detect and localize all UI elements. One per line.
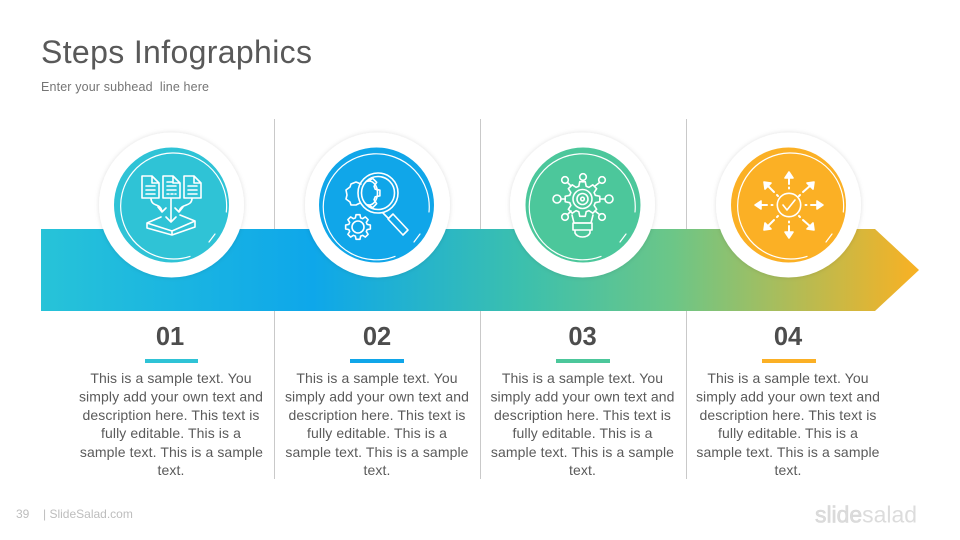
step 3 [490, 132, 675, 478]
title: Steps Infographics [41, 34, 312, 70]
step 1 accent bar [145, 359, 198, 363]
step 2 text: text. [364, 462, 390, 478]
footer site name: | SlideSalad.com [43, 507, 133, 521]
step 2 number: 02 [363, 323, 391, 351]
step 3 text: simply add your own text and [490, 388, 675, 404]
icon: light bulb network [553, 174, 613, 237]
step 3 accent bar [556, 359, 610, 363]
step 4 text: simply add your own text and [696, 388, 880, 404]
icon: documents into tray [142, 176, 201, 235]
step 1 text: text. [158, 462, 184, 478]
step 3 number: 03 [568, 323, 597, 351]
step 4 [696, 132, 880, 478]
step 2 [285, 132, 469, 478]
step 2 text: sample text. This is a sample [285, 444, 469, 460]
step 1 circle badge [99, 132, 244, 278]
step 1 text: sample text. This is a sample [80, 444, 263, 460]
step 4 accent bar [762, 359, 816, 363]
step 3 text: description here. This text is [494, 407, 671, 423]
step 2 text: This is a sample text. You [296, 370, 458, 386]
step 4 text: fully editable. This is a [718, 425, 858, 441]
step 3 circle badge [510, 132, 655, 278]
step 4 circle badge [716, 132, 861, 278]
icon: check with outward arrows [755, 172, 823, 238]
step 4 text: text. [775, 462, 801, 478]
step 2 text [285, 370, 469, 478]
step 3 text: sample text. This is a sample [491, 444, 674, 460]
icon: magnifier and gears [344, 173, 408, 239]
footer logo wordmark: slidesalad [815, 502, 917, 528]
step 2 text: simply add your own text and [285, 388, 469, 404]
step 1 [79, 132, 263, 478]
footer page number: 39 [16, 507, 30, 521]
step 4 text: sample text. This is a sample [696, 444, 880, 460]
step 4 text: This is a sample text. You [707, 370, 869, 386]
step 1 number: 01 [156, 323, 184, 351]
step 3 text [490, 370, 675, 478]
subtitle: Enter your subhead line here [41, 80, 209, 94]
step 3 text: This is a sample text. You [502, 370, 663, 386]
step 4 text [696, 370, 880, 478]
step 4 text: description here. This text is [699, 407, 877, 423]
step 1 text: This is a sample text. You [90, 370, 252, 386]
step 4 number: 04 [774, 323, 803, 351]
step 1 text: simply add your own text and [79, 388, 263, 404]
step 3 text: fully editable. This is a [513, 425, 653, 441]
column dividers [274, 119, 686, 479]
step 2 accent bar [350, 359, 404, 363]
gradient arrow band [41, 229, 919, 311]
step 2 text: fully editable. This is a [307, 425, 447, 441]
step 3 text: text. [569, 462, 596, 478]
step 2 text: description here. This text is [288, 407, 466, 423]
step 1 text: description here. This text is [82, 407, 260, 423]
step 1 text: fully editable. This is a [101, 425, 241, 441]
step 1 text [79, 370, 263, 478]
step 2 circle badge [305, 132, 450, 278]
